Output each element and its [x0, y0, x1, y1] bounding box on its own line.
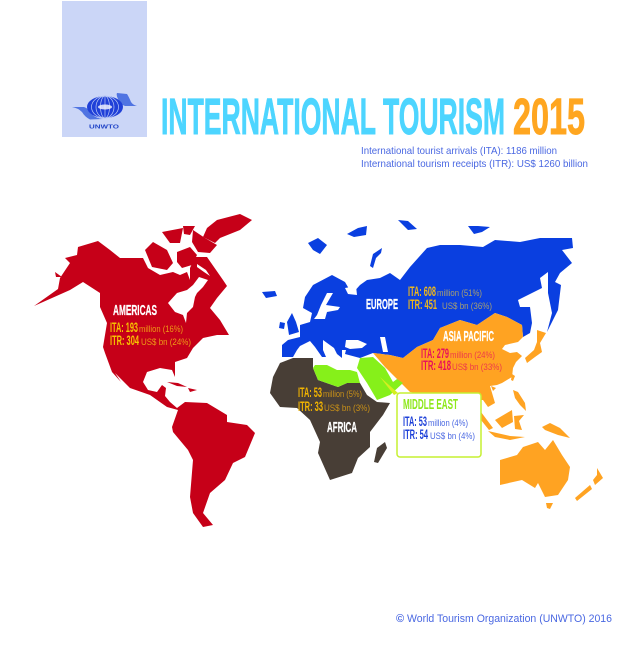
label: Europe: million (51%) [437, 288, 482, 299]
global totals text: International tourism receipts (ITR): US$ 1260 billion [361, 158, 588, 170]
global totals text: International tourist arrivals (ITA): 1186 million [361, 145, 557, 157]
global totals text [361, 145, 588, 170]
label: Africa: million (5%) [323, 389, 362, 400]
label: Americas: US$ bn (24%) [141, 337, 191, 348]
label: Asia Pacific: US$ bn (33%) [452, 362, 502, 373]
seas cut out of Eurasia [314, 258, 400, 352]
label: Asia Pacific: ITA: 279 [421, 346, 449, 361]
map: Americas [34, 214, 255, 527]
label: Europe: EUROPE [366, 296, 398, 313]
title year: 2015 [513, 88, 585, 145]
bays cut out of Canada [168, 264, 210, 323]
map: Africa [270, 358, 390, 480]
label: Africa: ITR: 33 [298, 399, 323, 414]
label: Europe [366, 284, 492, 313]
label: Asia Pacific: ITR: 418 [421, 358, 451, 373]
copyright footer: © [396, 613, 404, 625]
label: Americas [110, 302, 191, 348]
label: Africa: AFRICA [327, 419, 357, 436]
callout: Middle East [380, 377, 481, 457]
icon: UNWTO globe [72, 93, 137, 120]
logo wordmark: UNWTO [89, 124, 120, 130]
label: Asia Pacific [421, 328, 502, 373]
label: Americas: ITR: 304 [110, 333, 139, 348]
label: Europe: ITR: 451 [408, 297, 437, 312]
label: Americas: AMERICAS [113, 302, 157, 319]
copyright footer: World Tourism Organization (UNWTO) 2016 [407, 613, 612, 625]
label: Africa: ITA: 53 [298, 385, 322, 400]
logo panel [62, 1, 147, 137]
map: Middle East [313, 357, 403, 400]
label: Africa: US$ bn (3%) [324, 403, 370, 414]
label: Europe: ITA: 608 [408, 284, 436, 299]
label: Africa [298, 385, 370, 436]
label: Americas: ITA: 193 [110, 320, 138, 335]
stats: Middle East: US$ bn (4%) [430, 431, 475, 442]
label: Americas: million (16%) [139, 324, 183, 335]
map: Asia Pacific [373, 313, 603, 509]
map: Europe and Russia [262, 220, 573, 358]
label: Asia Pacific: million (24%) [450, 350, 495, 361]
heading: Middle East: MIDDLE EAST [403, 396, 458, 413]
stats: Middle East: ITA: 53 [403, 414, 427, 429]
stats: Middle East [403, 414, 475, 442]
stats: Middle East: million (4%) [428, 418, 468, 429]
label: Asia Pacific: ASIA PACIFIC [443, 328, 494, 345]
label: Europe: US$ bn (36%) [442, 301, 492, 312]
stats: Middle East: ITR: 54 [403, 427, 428, 442]
